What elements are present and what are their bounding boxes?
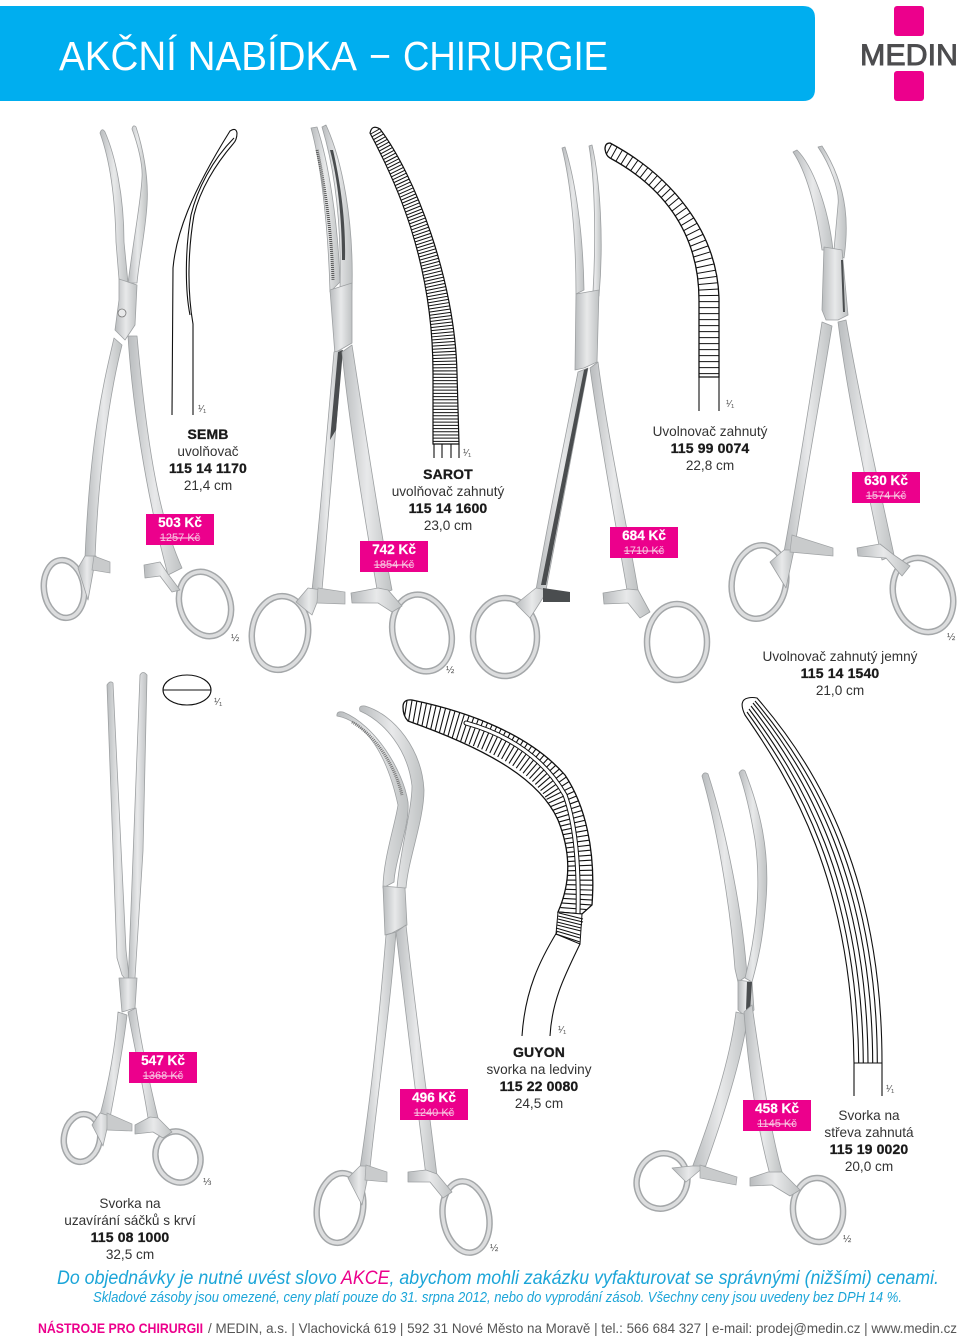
instrument: SEMB forceps photo (40, 126, 240, 644)
tip drawing: intestinal clamp (742, 698, 882, 1096)
instrument: curved dissector photo (473, 145, 707, 680)
text: SEMB product: 115 14 1170 (169, 460, 247, 476)
banner background (0, 6, 815, 101)
scale label 1/3: ⅓ (203, 1177, 212, 1188)
scale label 1/2: ½ (490, 1243, 499, 1254)
tip drawing: GUYON (403, 700, 593, 1036)
text: SEMB product (169, 426, 247, 493)
text: GUYON product: GUYON (513, 1044, 565, 1060)
text: GUYON product: 115 22 0080 (500, 1078, 578, 1094)
tip drawing: Uvolňovač zahnutý (605, 143, 719, 411)
scale label 1/2: ½ (446, 665, 455, 676)
price tag: 742 Kč: 742 Kč (372, 542, 416, 557)
header banner (0, 6, 815, 101)
text: Svorka na střeva zahnutá product: střeva zahnutá (824, 1125, 914, 1140)
price tag: 742 Kč: 1854 Kč (374, 559, 415, 571)
logo: MEDIN (860, 6, 958, 101)
price tag: 684 Kč: 1710 Kč (624, 545, 665, 557)
text: SEMB product: SEMB (187, 426, 229, 442)
text: Uvolňovač zahnutý product: 22,8 cm (686, 458, 734, 473)
text: Uvolňovač zahnutý product: Uvolnovač zahnutý (653, 424, 768, 439)
price tag: 503 Kč: 1257 Kč (160, 532, 201, 544)
logo cross top (894, 6, 924, 36)
price tag: 547 Kč: 547 Kč (141, 1053, 185, 1068)
scale label 1/2: ½ (843, 1234, 852, 1245)
text: Svorka na uzavírání sáčků s krví product: 32,5 cm (106, 1247, 154, 1262)
text: SEMB product: uvolňovač (177, 444, 239, 459)
text: Uvolňovač zahnutý product: 115 99 0074 (671, 440, 749, 456)
price tag: 503 Kč (146, 514, 214, 545)
text: Uvolnovač zahnutý jemný product (763, 649, 918, 698)
price tag: 458 Kč: 458 Kč (755, 1101, 799, 1116)
text: Svorka na uzavírání sáčků s krví product: uzavírání sáčků s krví (64, 1213, 196, 1228)
text: SAROT product: 115 14 1600 (409, 500, 487, 516)
instrument: curved intestinal clamp photo (629, 770, 846, 1244)
text: Uvolňovač zahnutý product (653, 424, 768, 473)
price tag: 684 Kč (610, 527, 678, 558)
title: − (369, 33, 391, 79)
text: Uvolnovač zahnutý jemný product: 115 14 1540 (801, 665, 879, 681)
text: SEMB product: 21,4 cm (184, 478, 232, 493)
price tag: 547 Kč: 1368 Kč (143, 1070, 184, 1082)
text: SAROT product: uvolňovač zahnutý (392, 484, 504, 499)
text: Svorka na střeva zahnutá product: 20,0 cm (845, 1159, 893, 1174)
text: SAROT product: 23,0 cm (424, 518, 472, 533)
scale label 1/2: ½ (947, 632, 956, 643)
price tag: 630 Kč: 1574 Kč (866, 490, 907, 502)
instrument: fine curved dissector photo (726, 146, 960, 641)
price tag: 496 Kč: 1240 Kč (414, 1107, 455, 1119)
price tag: 630 Kč (852, 472, 920, 503)
text: SAROT product: SAROT (423, 466, 473, 482)
title: AKČNÍ NABÍDKA (59, 33, 358, 79)
instrument: GUYON kidney clamp photo (312, 706, 495, 1256)
text: Svorka na střeva zahnutá product: 115 19 0020 (830, 1141, 908, 1157)
price tag: 742 Kč (360, 541, 428, 572)
text: GUYON product: 24,5 cm (515, 1096, 563, 1111)
tip drawing: oval cross-section (163, 675, 211, 705)
scale label 1/1: ¹⁄₁ (886, 1084, 895, 1095)
title (59, 33, 608, 79)
price tag: 496 Kč: 496 Kč (412, 1090, 456, 1105)
text: GUYON product: svorka na ledviny (486, 1062, 592, 1077)
price tag: 547 Kč (129, 1052, 197, 1083)
logo cross bottom (894, 71, 924, 101)
price tag: 458 Kč (743, 1100, 811, 1131)
scale label 1/1: ¹⁄₁ (558, 1025, 567, 1036)
scale label 1/1: ¹⁄₁ (214, 697, 223, 708)
price tag: 684 Kč: 684 Kč (622, 528, 666, 543)
text: Uvolnovač zahnutý jemný product: 21,0 cm (816, 683, 864, 698)
price tag: 458 Kč: 1145 Kč (757, 1118, 797, 1130)
text: Svorka na střeva zahnutá product: Svorka na (838, 1108, 900, 1123)
text: Svorka na uzavírání sáčků s krví product (64, 1196, 196, 1262)
scale label 1/1: ¹⁄₁ (726, 399, 735, 410)
scale label 1/1: ¹⁄₁ (198, 404, 207, 415)
text: SAROT product (392, 466, 504, 533)
price tag: 496 Kč (400, 1089, 468, 1120)
text: Uvolnovač zahnutý jemný product: Uvolnovač zahnutý jemný (763, 649, 918, 664)
title: CHIRURGIE (403, 33, 608, 79)
tip drawing: SEMB (172, 129, 237, 415)
footer contact line: NÁSTROJE PRO CHIRURGII (38, 1320, 203, 1336)
tip drawing: SAROT (370, 127, 459, 458)
price tag: 630 Kč: 630 Kč (864, 473, 908, 488)
logo wordmark: MEDIN (860, 39, 958, 72)
text: Svorka na uzavírání sáčků s krví product: Svorka na (99, 1196, 161, 1211)
instrument: SAROT forceps photo (247, 125, 460, 678)
price tag: 503 Kč: 503 Kč (158, 515, 202, 530)
scale label 1/1: ¹⁄₁ (463, 448, 472, 459)
instrument: long straight clamp photo (60, 672, 208, 1189)
notice: ordering keyword: Do objednávky je nutné uvést slovo AKCE, abychom mohli zakázku vyfakturovat se správnými (nižšími) cenami. (57, 1268, 939, 1289)
text: Svorka na uzavírání sáčků s krví product: 115 08 1000 (91, 1229, 169, 1245)
text: GUYON product (486, 1044, 592, 1111)
text: Svorka na střeva zahnutá product (824, 1108, 914, 1174)
scale label 1/2: ½ (231, 633, 240, 644)
